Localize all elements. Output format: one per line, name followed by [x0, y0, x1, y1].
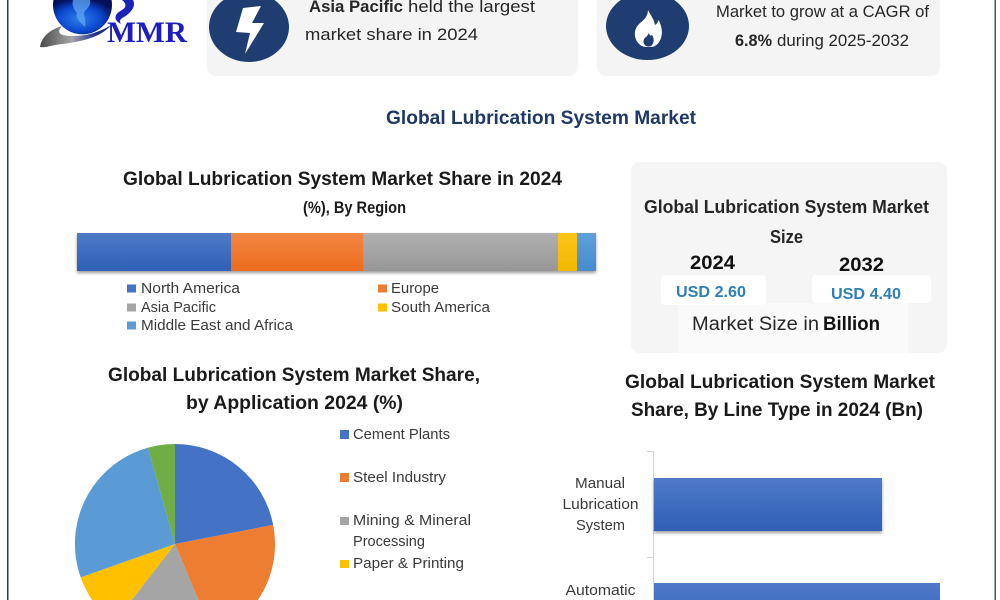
value 2032: 2032 [839, 255, 884, 276]
text: Asia Pacific held the largest: market share in 2024 [305, 25, 478, 44]
legend: applications: Mining & Mineral [353, 512, 471, 529]
pie chart [75, 444, 275, 600]
legend: regions: Europe [391, 280, 439, 297]
value 2024 [661, 253, 766, 305]
value 2024: USD 2.60 [676, 284, 746, 301]
caption: market size in billion: Billion [823, 314, 880, 335]
legend: applications: Cement Plants [353, 426, 450, 443]
heading: region chart: Global Lubrication System Market Share in 2024 [123, 169, 562, 190]
caption: market size in billion: Market Size in [692, 314, 819, 335]
legend: regions: North America [141, 280, 241, 297]
text: CAGR statement [716, 3, 929, 50]
icon: flame [606, 0, 689, 60]
legend: regions: South America [391, 299, 491, 316]
card: Asia Pacific [207, 0, 578, 76]
legend: regions: Asia Pacific [141, 299, 216, 316]
value 2032: USD 4.40 [831, 286, 901, 303]
icon: lightning bolt [209, 0, 289, 62]
legend: regions [127, 280, 491, 334]
legend: applications: Processing [353, 533, 425, 550]
value 2024: 2024 [690, 253, 735, 274]
card: CAGR [597, 0, 940, 76]
heading: line type chart [625, 372, 936, 421]
heading: line type chart: Share, By Line Type in 2024 (Bn) [631, 400, 923, 421]
panel: market size [631, 162, 947, 353]
bar: manual lubrication system: Lubrication [562, 496, 638, 513]
panel: market share by region [77, 169, 596, 334]
bar: automatic lubrication system: Automatic [566, 582, 636, 599]
axis [647, 452, 654, 600]
heading: application chart: by Application 2024 (%) [186, 393, 403, 414]
main title: Global Lubrication System Market [386, 108, 697, 129]
legend: applications: Steel Industry [353, 469, 447, 486]
caption: market size in billion [692, 314, 880, 335]
heading: application chart: Global Lubrication System Market Share, [108, 365, 480, 386]
text: Asia Pacific held the largest [305, 0, 535, 44]
logo: MMR: MMR [107, 16, 187, 49]
legend: regions: Middle East and Africa [141, 317, 294, 334]
legend: applications [340, 426, 471, 572]
value 2032 [812, 255, 931, 303]
bar: manual lubrication system: System [576, 517, 625, 534]
legend: applications: Paper & Printing [353, 555, 464, 572]
stacked bar chart [77, 233, 596, 271]
heading: region chart [123, 169, 562, 217]
panel: share by application [75, 365, 480, 600]
bar: manual lubrication system: Manual [575, 475, 625, 492]
heading: market size: Size [770, 227, 803, 247]
heading: application chart [108, 365, 480, 414]
logo: MMR [40, 0, 187, 49]
bar: automatic lubrication system [566, 582, 940, 600]
heading: line type chart: Global Lubrication System Market [625, 372, 936, 393]
text: CAGR statement: 6.8% [735, 32, 772, 50]
text: CAGR statement: during 2025-2032 [777, 32, 909, 50]
bar: manual lubrication system [562, 475, 882, 534]
panel: share by line type [562, 372, 940, 600]
heading: market size: Global Lubrication System Market [644, 197, 929, 217]
text: CAGR statement: Market to grow at a CAGR of [716, 3, 929, 21]
heading: region chart: (%), By Region [303, 199, 406, 217]
heading: market size [644, 197, 929, 247]
